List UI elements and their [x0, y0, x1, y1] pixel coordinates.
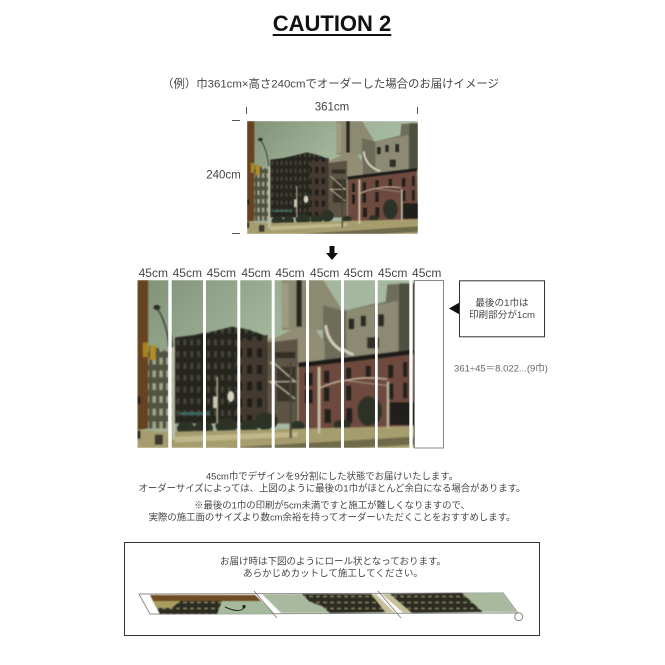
strip width labels: 45cm — [412, 266, 441, 280]
roll illustration — [139, 591, 523, 621]
width label: 361cm — [315, 101, 349, 113]
delivery description: 45cm巾でデザインを9分割にした状態でお届けいたします。 — [206, 470, 458, 481]
roll delivery text — [220, 556, 446, 579]
strip width labels: 45cm — [139, 266, 168, 280]
calculation note: 361÷45＝8.022...(9巾) — [454, 363, 548, 374]
callout text: 最後の1巾は — [475, 298, 529, 309]
delivery description — [139, 470, 525, 522]
callout pointer — [449, 302, 460, 314]
strip width labels — [138, 266, 441, 280]
callout text — [469, 298, 535, 321]
strip width labels: 45cm — [378, 266, 407, 280]
dimension ticks — [232, 107, 418, 234]
delivery description: ※最後の1巾の印刷が5cm未満ですと施工が難しくなりますので、 — [194, 499, 470, 510]
panel strips: design split into 9 — [137, 280, 444, 448]
strip width labels: 45cm — [344, 266, 373, 280]
icon: down arrow — [326, 246, 338, 260]
strip width labels: 45cm — [241, 266, 271, 280]
strip width labels: 45cm — [275, 266, 305, 280]
strip width labels: 45cm — [310, 266, 339, 280]
title: CAUTION 2 — [273, 10, 391, 36]
height label: 240cm — [206, 169, 241, 181]
strip width labels: 45cm — [173, 266, 202, 280]
strip width labels: 45cm — [207, 266, 236, 280]
full design photo — [247, 121, 418, 234]
roll delivery text: お届け時は下図のようにロール状となっております。 — [220, 556, 446, 567]
example caption: （例）巾361cm×高さ240cmでオーダーした場合のお届けイメージ — [162, 78, 499, 90]
roll delivery text: あらかじめカットして施工してください。 — [243, 568, 423, 579]
roll box — [124, 542, 540, 636]
callout text: 印刷部分が1cm — [469, 310, 535, 321]
callout box — [460, 281, 544, 337]
delivery description: 実際の施工面のサイズより数cm余裕を持ってオーダーいただくことをおすすめします。 — [149, 511, 515, 522]
delivery description: オーダーサイズによっては、上図のように最後の1巾がほとんど余白になる場合があります。 — [139, 482, 525, 493]
